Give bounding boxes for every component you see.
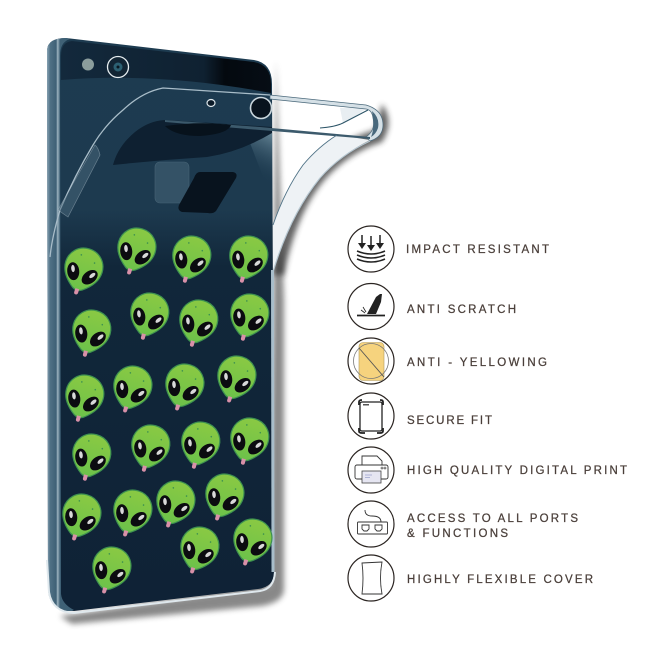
outer curve: [273, 141, 370, 272]
camera: [108, 56, 128, 78]
feature: high quality digital print: [348, 447, 627, 493]
label: HIGHLY FLEXIBLE COVER: [407, 574, 593, 586]
phone shadow: [60, 60, 284, 624]
clear case flap shadow: [273, 104, 388, 275]
hole tint in flap: [340, 108, 367, 123]
left metal edge: [47, 38, 74, 611]
label: ANTI - YELLOWING: [407, 357, 547, 369]
label: ANTI SCRATCH: [407, 304, 516, 316]
flap lower bar: [165, 120, 370, 139]
icon: flexible cover: [348, 555, 394, 601]
clear case band: [273, 135, 370, 272]
alien pattern: [55, 223, 277, 599]
flash: [82, 58, 94, 70]
bottom case rim: [47, 560, 275, 613]
top glass band: [61, 41, 271, 93]
label: SECURE FIT: [407, 415, 492, 427]
feature: anti scratch: [348, 284, 516, 330]
label: HIGH QUALITY DIGITAL PRINT: [407, 465, 627, 477]
fingerprint cut-out: [178, 172, 237, 213]
feature: secure fit: [348, 393, 492, 439]
phone with clear case: [47, 38, 388, 624]
icon: case outline: [348, 393, 394, 439]
icon: blade scratching surface: [348, 284, 394, 330]
icon: ports: [348, 501, 394, 547]
feature: access to all ports: [348, 501, 578, 547]
icon: printer: [348, 447, 394, 493]
case camera window: [155, 162, 189, 203]
label: IMPACT RESISTANT: [406, 244, 549, 256]
label: ACCESS TO ALL PORTS: [407, 513, 578, 525]
flap tip shading: [371, 111, 378, 137]
feature: anti yellowing: [348, 338, 547, 384]
feature: impact resistant: [348, 226, 549, 272]
feature: highly flexible cover: [348, 555, 593, 601]
flap outline: [50, 88, 270, 257]
icon: yellow case crossed out: [348, 338, 394, 384]
case side button: [58, 145, 100, 217]
phone body: [47, 38, 274, 611]
case hole small: [207, 100, 215, 106]
label: [407, 513, 578, 540]
flap diagonal line: [320, 110, 368, 128]
case speaker slot: [165, 123, 231, 136]
inner curve: [273, 135, 337, 225]
right metal edge: [271, 270, 274, 572]
right edge highlight below flap: [245, 130, 272, 200]
shade under flap: [113, 120, 272, 165]
icon: impact arrows: [348, 226, 394, 272]
label: & FUNCTIONS: [407, 528, 508, 540]
flap top bar: [270, 95, 383, 141]
case camera ring: [250, 98, 272, 118]
